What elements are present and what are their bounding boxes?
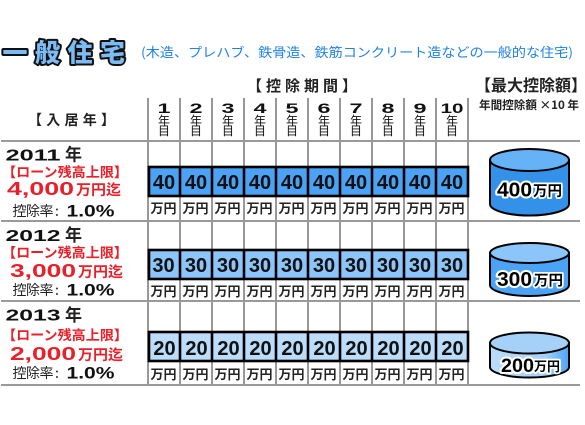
bars: 40 per year	[149, 166, 468, 217]
year column headers: 10	[440, 100, 464, 116]
bars: 30 per year: 万円	[342, 281, 369, 300]
year column headers: 1	[158, 100, 171, 116]
subtitle: (木造、プレハブ、鉄骨造、鉄筋コンクリート造などの一般的な住宅)	[141, 42, 573, 61]
year column headers: 3	[222, 100, 235, 116]
year column headers: 9	[414, 100, 427, 116]
row label: 2012: 【ローン残高上限】	[2, 242, 128, 262]
bars: 20 per year: 万円	[438, 364, 465, 383]
note: annual deduction times 10: 年間控除額 ×10 年	[479, 97, 579, 113]
bars: 30 per year	[149, 249, 468, 300]
row label: 2012: 年	[65, 221, 82, 246]
bars: 20 per year: 20	[281, 338, 304, 360]
row label: 2011: 年	[65, 140, 82, 166]
row label: 2011: 4,000	[7, 179, 74, 199]
bars: 30 per year: 万円	[214, 281, 241, 300]
bars: 20 per year: 20	[153, 338, 176, 360]
bars: 20 per year: 万円	[342, 364, 369, 383]
bars: 40 per year: 万円	[310, 198, 337, 217]
bars: 40 per year: 40	[409, 172, 431, 194]
bars: 20 per year: 万円	[182, 364, 209, 383]
bars: 30 per year: 万円	[406, 281, 433, 300]
row: 2011	[2, 140, 569, 221]
bars: 40 per year: 40	[249, 172, 271, 194]
bars: 20 per year: 20	[345, 338, 368, 360]
year column headers	[158, 100, 464, 139]
bars: 30 per year: 30	[217, 255, 239, 277]
bars: 40 per year: 40	[217, 172, 239, 194]
bars: 30 per year: 30	[249, 255, 271, 277]
year column headers: 年	[446, 112, 458, 129]
year column headers: 年	[190, 112, 202, 129]
row label: 2011: 控除率:	[12, 201, 59, 221]
row label: 2011	[2, 140, 128, 221]
year column headers: 年	[158, 112, 170, 129]
bars: 40 per year: 万円	[406, 198, 433, 217]
bars: 20 per year: 万円	[246, 364, 273, 383]
row label: 2013	[2, 301, 128, 383]
row label: 2011: 1.0%	[66, 202, 114, 220]
row label: 2012: 控除率:	[12, 280, 59, 300]
bars: 40 per year: 40	[377, 172, 399, 194]
bars: 30 per year: 万円	[150, 281, 177, 300]
bars: 40 per year: 万円	[438, 198, 465, 217]
icon: cylinder 200: 200	[501, 356, 534, 377]
bars: 20 per year: 20	[217, 338, 240, 360]
row label: 2013: 【ローン残高上限】	[2, 324, 128, 344]
bars: 20 per year: 20	[441, 338, 464, 360]
bars: 40 per year: 40	[441, 172, 463, 194]
bars: 40 per year: 40	[185, 172, 207, 194]
bars: 20 per year	[149, 331, 468, 383]
bars: 30 per year: 30	[409, 255, 431, 277]
year column headers: 7	[350, 100, 363, 116]
icon: cylinder 400: 万円	[533, 180, 562, 201]
bars: 30 per year: 30	[185, 255, 207, 277]
icon: cylinder 400	[490, 149, 569, 216]
row label: 2013: 万円迄	[78, 344, 124, 365]
bars: 20 per year: 万円	[406, 364, 433, 383]
year column headers: 目	[414, 122, 426, 139]
bars: 20 per year: 20	[409, 338, 432, 360]
bars: 30 per year: 万円	[182, 281, 209, 300]
row label: 2011: 【ローン残高上限】	[2, 161, 128, 181]
bars: 30 per year: 30	[345, 255, 367, 277]
title: 一般住宅	[2, 34, 133, 70]
bars: 40 per year: 万円	[246, 198, 273, 217]
row label: 2012: 1.0%	[66, 280, 114, 300]
row label: 2013: 2013	[6, 308, 61, 324]
icon: cylinder 400: 400	[497, 180, 532, 202]
year column headers: 年	[286, 112, 298, 129]
heading: deduction period: 【控除期間】	[247, 75, 357, 96]
row label: 2012: 3,000	[10, 261, 76, 281]
bars: 30 per year: 万円	[438, 281, 465, 300]
year column headers: 目	[190, 122, 202, 139]
bars: 30 per year: 30	[281, 255, 303, 277]
bars: 40 per year: 万円	[214, 198, 241, 217]
year column headers: 4	[254, 100, 267, 116]
year column headers: 年	[318, 112, 330, 129]
bars: 20 per year: 万円	[214, 364, 241, 383]
bars: 30 per year: 30	[313, 255, 335, 277]
bars: 30 per year: 30	[152, 255, 175, 277]
icon: cylinder 300	[490, 243, 569, 296]
year column headers: 年	[254, 112, 266, 129]
bars: 20 per year: 万円	[150, 364, 177, 383]
row label: 2013: 1.0%	[66, 364, 114, 382]
year column headers: 8	[382, 100, 395, 116]
row label: 2011: 万円迄	[76, 179, 122, 200]
bars: 40 per year: 40	[281, 172, 303, 194]
row label: 2012: 2012	[6, 228, 61, 245]
year column headers: 目	[158, 122, 170, 139]
bars: 20 per year: 20	[185, 338, 208, 360]
bars: 30 per year: 万円	[246, 281, 273, 300]
row: 2012	[2, 221, 569, 300]
year column headers: 5	[286, 100, 299, 116]
bars: 20 per year: 万円	[310, 364, 337, 383]
bars: 40 per year: 万円	[278, 198, 305, 217]
bars: 40 per year: 40	[345, 172, 367, 194]
year column headers: 年	[222, 112, 234, 129]
icon: cylinder 200	[490, 332, 569, 378]
year column headers: 目	[318, 122, 330, 139]
row label: 2013: 年	[65, 301, 82, 326]
bars: 40 per year: 万円	[342, 198, 369, 217]
heading: maximum deduction: 【最大控除額】	[475, 72, 585, 96]
icon: cylinder 300: 300	[497, 269, 532, 291]
year column headers: 年	[382, 112, 394, 129]
year column headers: 2	[190, 100, 203, 116]
year column headers: 目	[222, 122, 234, 139]
row label: 2013: 2,000	[10, 344, 76, 364]
year column headers: 目	[254, 122, 266, 139]
bars: 20 per year: 万円	[374, 364, 401, 383]
bars: 40 per year: 万円	[150, 198, 177, 217]
bars: 30 per year: 万円	[278, 281, 305, 300]
bars: 30 per year: 30	[441, 255, 463, 277]
year column headers: 年	[414, 112, 426, 129]
year column headers: 6	[318, 100, 331, 116]
bars: 30 per year: 万円	[310, 281, 337, 300]
bars: 30 per year: 万円	[374, 281, 401, 300]
row label: 2013: 控除率:	[12, 363, 59, 383]
bars: 20 per year: 20	[313, 338, 336, 360]
heading: move-in year: 【入居年】	[28, 110, 115, 130]
bars: 40 per year: 40	[313, 172, 335, 194]
bars: 40 per year: 万円	[374, 198, 401, 217]
row: 2013	[2, 301, 569, 383]
year column headers: 年	[350, 112, 362, 129]
year column headers: 目	[350, 122, 362, 139]
row label: 2011: 2011	[6, 148, 61, 164]
bars: 40 per year: 40	[153, 172, 175, 194]
year column headers: 目	[446, 122, 458, 139]
icon: cylinder 300: 万円	[534, 270, 563, 290]
row label: 2012: 万円迄	[78, 261, 124, 282]
bars: 20 per year: 20	[377, 338, 400, 360]
bars: 20 per year: 20	[249, 338, 272, 360]
bars: 20 per year: 万円	[278, 364, 305, 383]
row label: 2012	[2, 221, 128, 300]
year column headers: 目	[286, 122, 298, 139]
icon: cylinder 200: 万円	[534, 356, 560, 375]
bars: 30 per year: 30	[377, 255, 399, 277]
bars: 40 per year: 万円	[182, 198, 209, 217]
year column headers: 目	[382, 122, 394, 139]
